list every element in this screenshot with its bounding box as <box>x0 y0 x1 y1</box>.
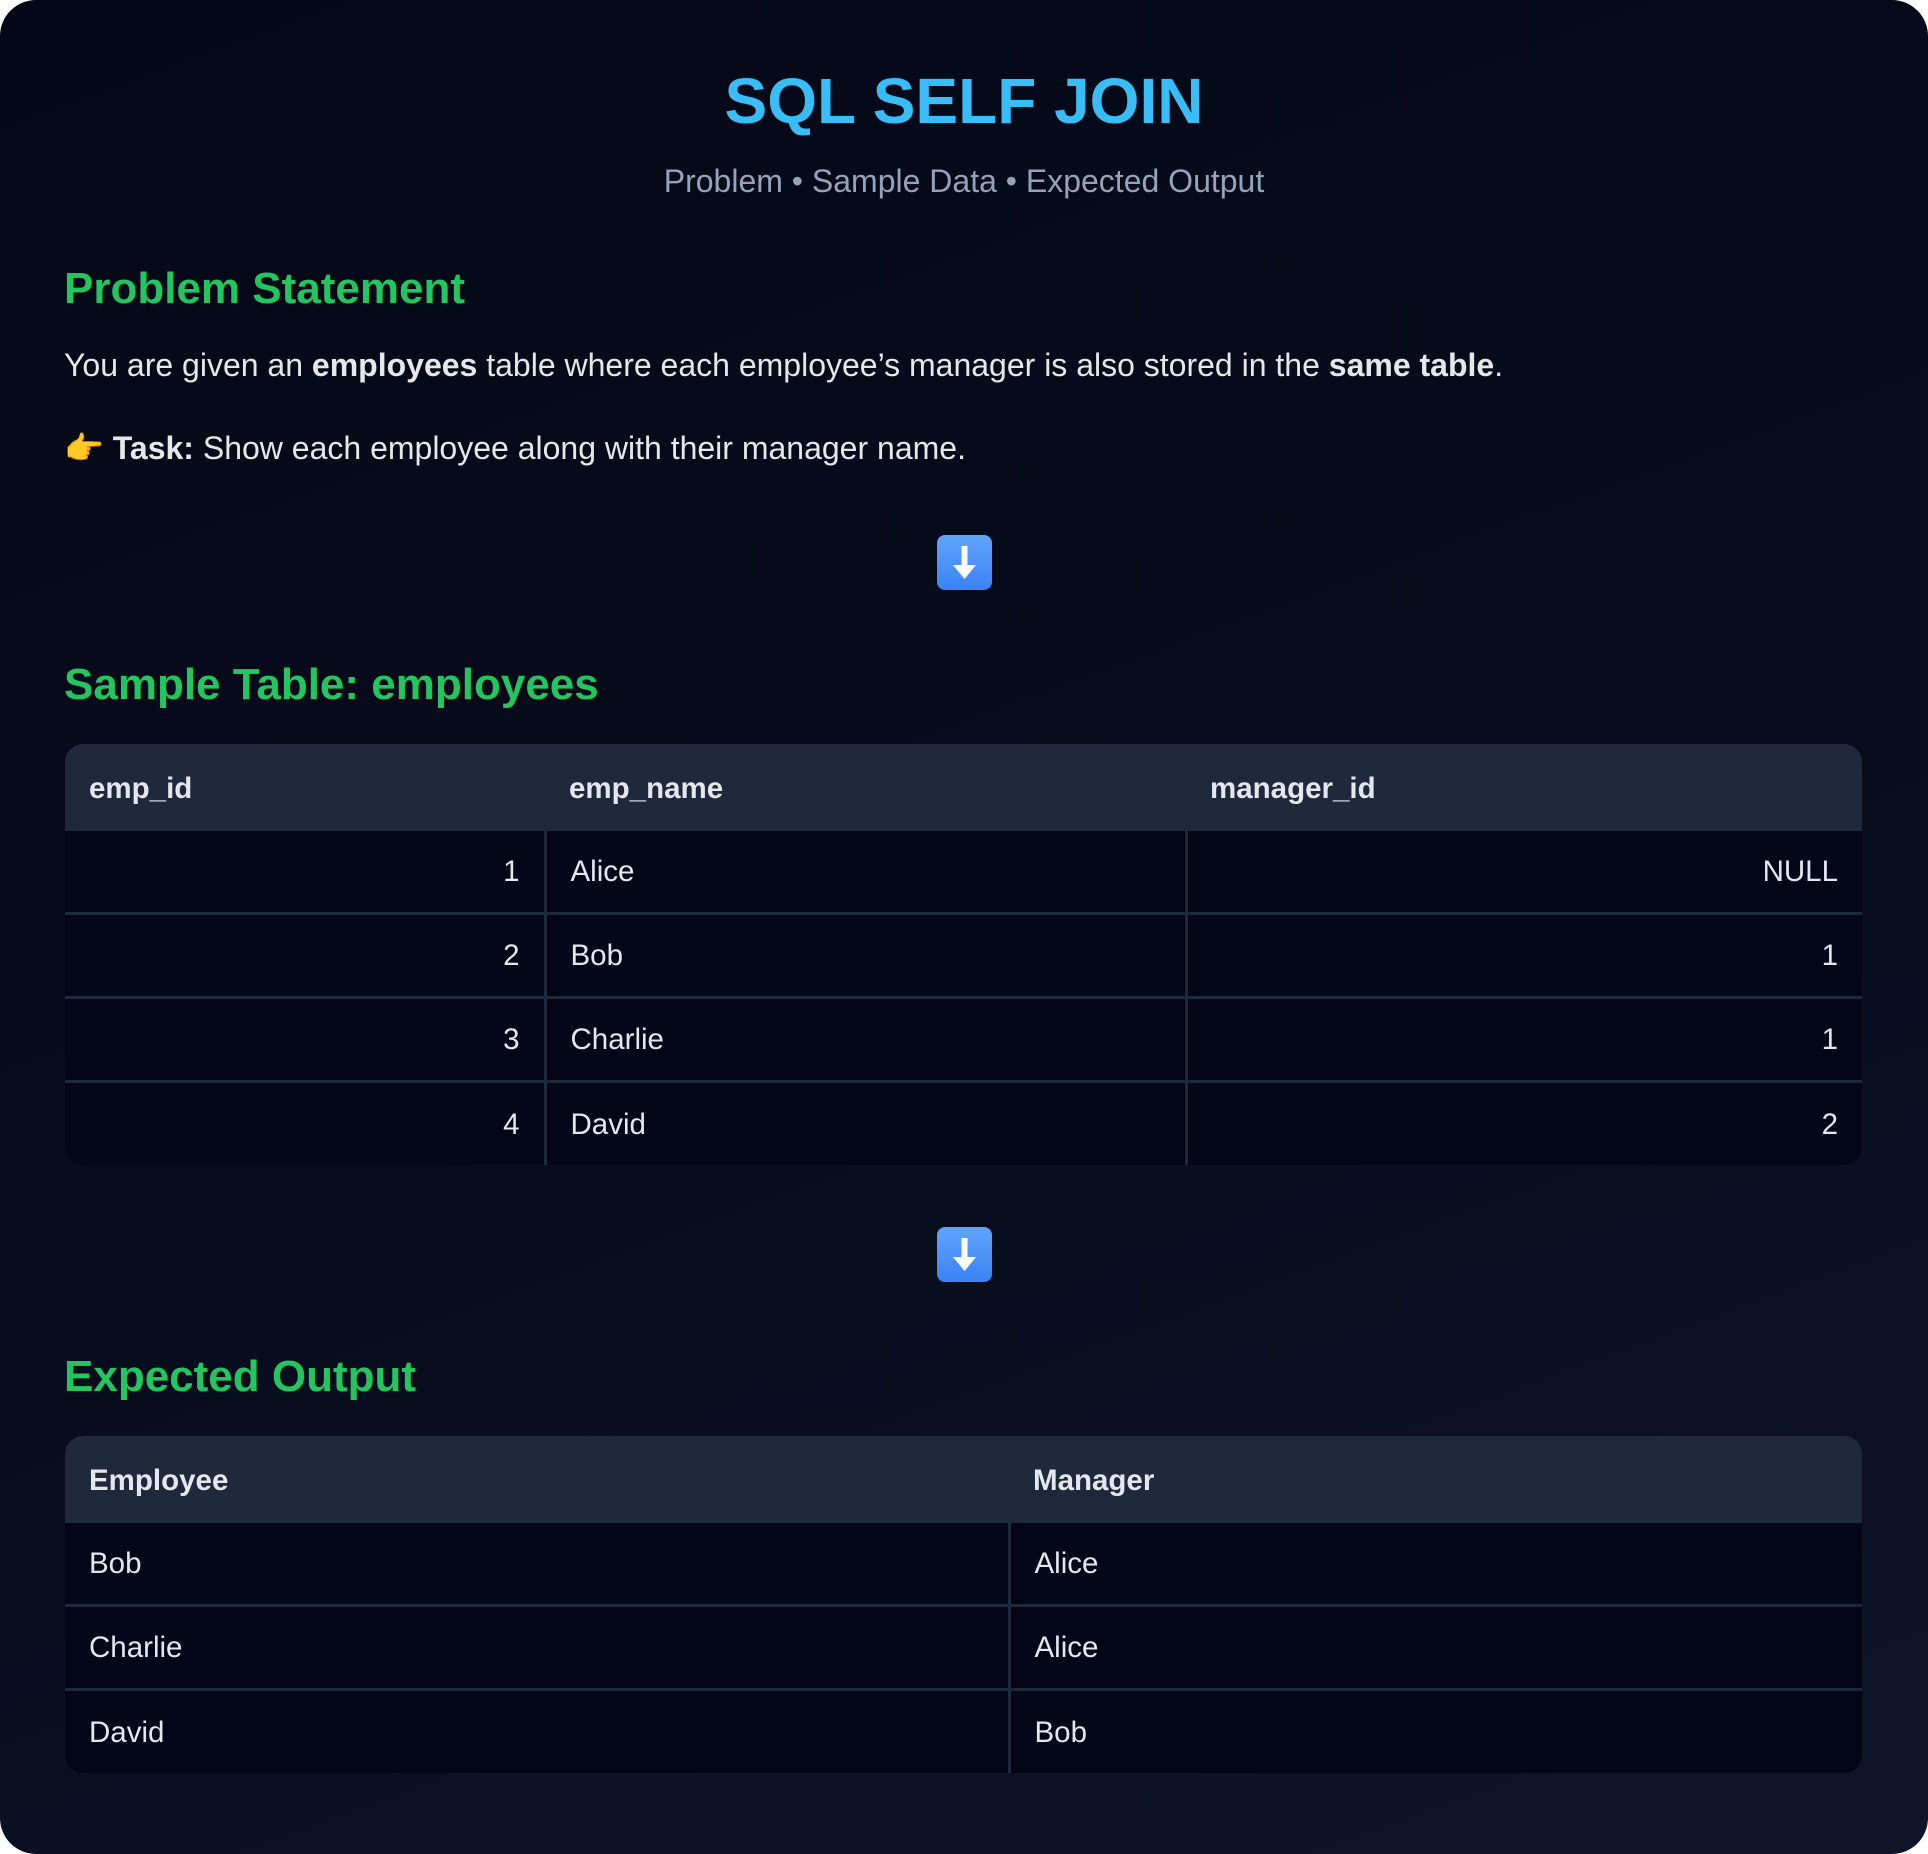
table: expected output: Employee <box>89 1464 228 1497</box>
arrow icon 1 <box>937 535 992 590</box>
table: employees: Alice <box>570 855 634 888</box>
problem text: You are given an employees table where each employee’s manager is also stored in the same table. <box>64 347 1503 383</box>
table: employees: 2 <box>1822 1108 1838 1141</box>
table: expected output: Manager <box>1033 1464 1154 1497</box>
table: employees: 1 <box>1822 1023 1838 1056</box>
table: employees: 1 <box>1822 939 1838 972</box>
table: employees: Charlie <box>570 1023 664 1056</box>
table: employees: 4 <box>503 1108 520 1141</box>
table: expected output: Alice <box>1034 1631 1098 1664</box>
table: employees: David <box>570 1108 646 1141</box>
arrow icon 2 <box>937 1227 992 1282</box>
table: expected output: Alice <box>1034 1547 1098 1580</box>
table: employees: manager_id <box>1210 772 1376 805</box>
subtitle: Problem • Sample Data • Expected Output <box>664 163 1264 199</box>
table: expected output: David <box>89 1716 164 1749</box>
heading: expected output: Expected Output <box>64 1352 416 1401</box>
title: SQL SELF JOIN <box>725 65 1203 137</box>
heading: problem statement: Problem Statement <box>64 264 465 313</box>
table: employees: NULL <box>1763 855 1838 888</box>
heading: sample table: Sample Table: employees <box>64 660 599 709</box>
table: expected output: Charlie <box>89 1631 182 1664</box>
table: employees: 2 <box>503 939 520 972</box>
table: expected output <box>65 1436 1862 1773</box>
table: expected output: Bob <box>1034 1716 1087 1749</box>
table: employees <box>65 744 1862 1165</box>
task text: 👉 Task: Show each employee along with their manager name. <box>64 430 966 466</box>
table: expected output: Bob <box>89 1547 142 1580</box>
table: employees: Bob <box>570 939 623 972</box>
table: employees: 1 <box>503 855 520 888</box>
table: employees: emp_name <box>569 772 723 805</box>
table: employees: emp_id <box>89 772 192 805</box>
table: employees: 3 <box>503 1023 520 1056</box>
